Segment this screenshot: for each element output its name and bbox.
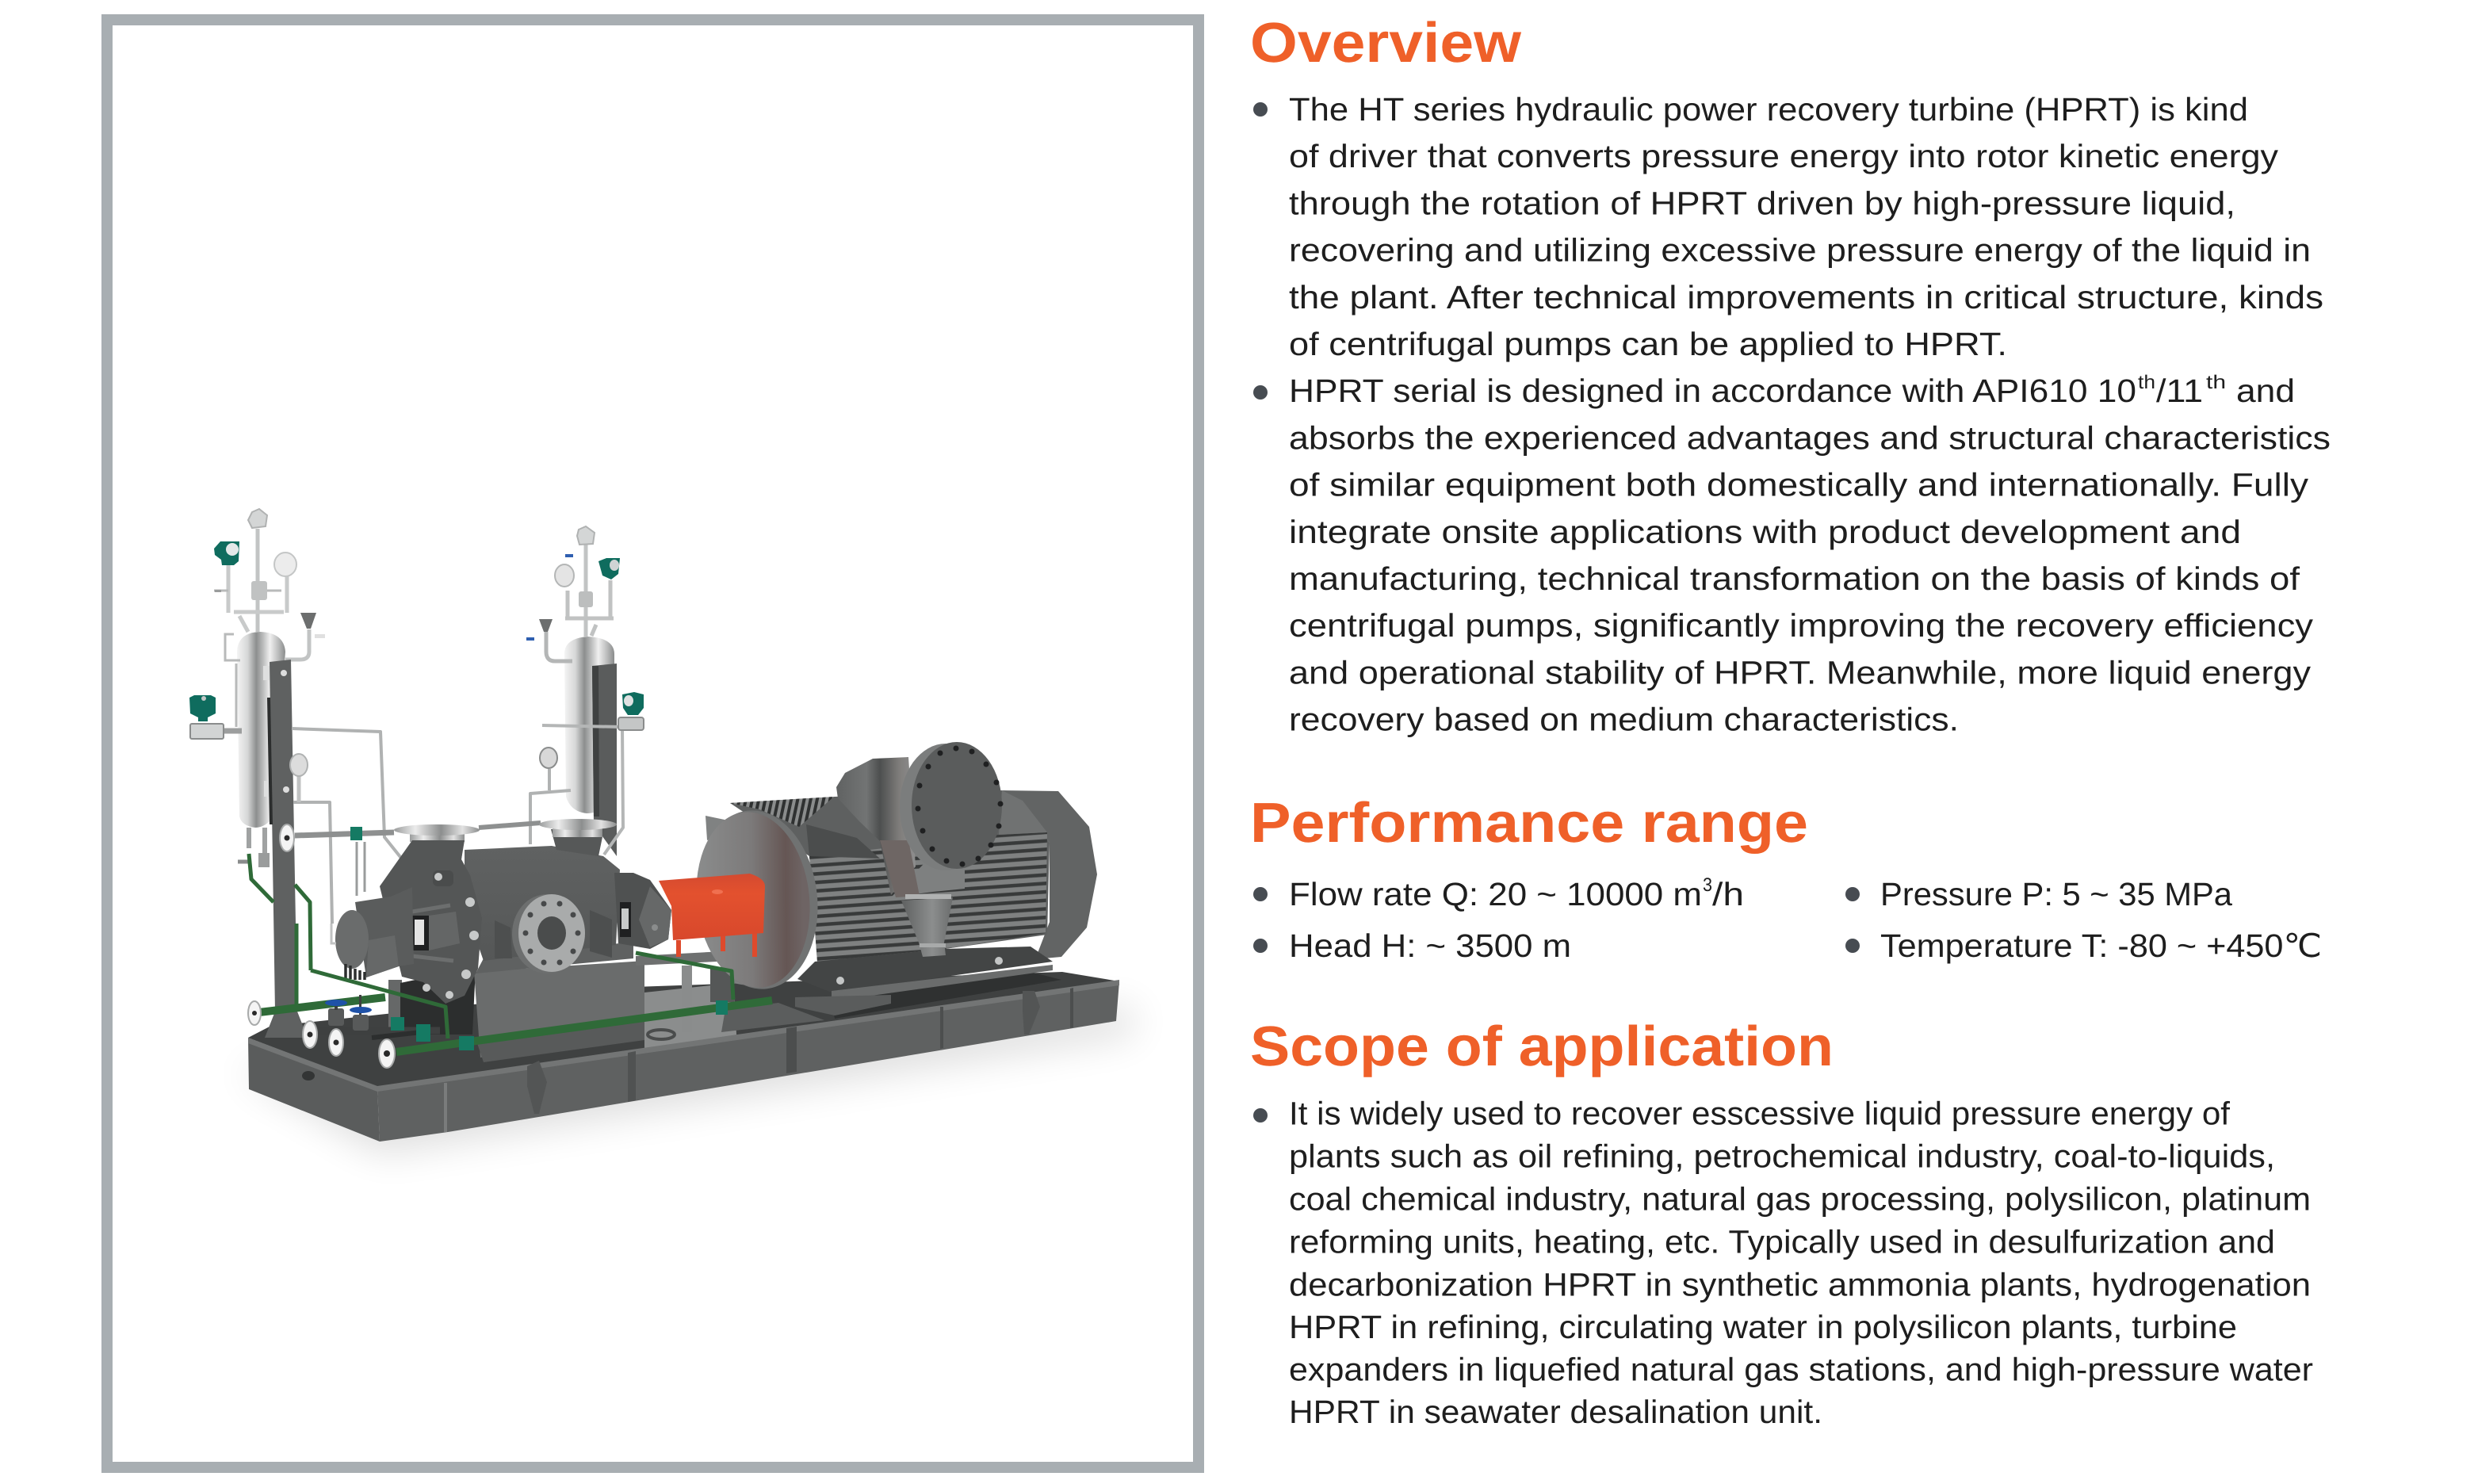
overview paragraph two: th <box>2138 372 2155 393</box>
green process piping: rear <box>249 854 385 1012</box>
list: performance values <box>1253 874 2322 964</box>
vessel: left seal pot <box>224 632 285 867</box>
pump: pedestal <box>474 942 644 1062</box>
overview paragraph two: and operational stability of HPRT. Meanwhile, more liquid energy <box>1289 654 2312 690</box>
overview paragraph two: absorbs the experienced advantages and structural characteristics <box>1289 419 2331 456</box>
pump: volute with bolts <box>380 840 482 1004</box>
valves and drain piping <box>319 995 440 1038</box>
bullet marker <box>1253 102 1268 117</box>
overview paragraph two: centrifugal pumps, significantly improving the recovery efficiency <box>1289 607 2314 644</box>
pressure gauges on piping <box>290 748 557 776</box>
vessel: right seal pot <box>564 637 614 813</box>
scope paragraph: coal chemical industry, natural gas processing, polysilicon, platinum <box>1289 1181 2311 1218</box>
overview paragraph one: recovering and utilizing excessive pressure energy of the liquid in <box>1289 232 2311 269</box>
baseplate top surface <box>248 972 1119 1088</box>
overview paragraph two: th <box>2206 372 2226 393</box>
transmitter: left side <box>189 695 224 739</box>
scope paragraph: HPRT in seawater desalination unit. <box>1289 1394 1822 1430</box>
item: pressure: Pressure P: 5 ~ 35 MPa <box>1880 876 2232 912</box>
motor: terminal reducer cone <box>901 894 953 957</box>
motor: front end shield <box>688 805 826 995</box>
teal pipe clamps <box>350 827 728 1050</box>
instrument tree: left <box>214 509 325 660</box>
motor: terminal box bracket <box>880 840 965 897</box>
instrument piping <box>292 725 623 924</box>
pump: coupling-end housing <box>614 873 671 949</box>
item: temperature: Temperature T: -80 ~ +450℃ <box>1880 928 2322 964</box>
item: head: Head H: ~ 3500 m <box>1289 928 1571 964</box>
overview paragraph one: of centrifugal pumps can be applied to HPRT. <box>1289 326 2007 362</box>
column: left support <box>265 660 308 1038</box>
coupling support table <box>636 950 767 1032</box>
item: flow rate: /h <box>1712 876 1744 912</box>
overview paragraph one: The HT series hydraulic power recovery turbine (HPRT) is kind <box>1289 91 2248 128</box>
heading: Performance range: Performance range <box>1250 792 1808 855</box>
ground shadow <box>238 1007 1134 1153</box>
coupling guard: red <box>659 874 765 957</box>
pump: barrel casing <box>465 846 620 961</box>
scope paragraph: decarbonization HPRT in synthetic ammonia plants, hydrogenation <box>1289 1267 2311 1303</box>
motor: rear fan cover <box>1002 790 1097 959</box>
illustration: HPRT turbine unit on baseplate <box>189 509 1134 1153</box>
heading: Overview: Overview <box>1250 12 1522 75</box>
item: flow rate: 3 <box>1703 874 1712 896</box>
motor: finned stator body <box>730 790 1050 962</box>
pump: bearing housing <box>331 887 414 980</box>
instrument tree: right <box>526 526 620 661</box>
pump: suction nozzle and flange <box>394 824 480 888</box>
overview paragraph two: recovery based on medium characteristics. <box>1289 702 1959 738</box>
panel: product image frame <box>107 20 1199 1467</box>
overview paragraph two <box>1289 372 2331 738</box>
pump: under-support <box>388 967 476 1035</box>
overview paragraph one: of driver that converts pressure energy into rotor kinetic energy <box>1289 138 2279 174</box>
overview paragraph two: /11 <box>2156 373 2203 409</box>
pump: discharge nozzle and flange <box>539 819 617 856</box>
scope paragraph <box>1289 1096 2313 1430</box>
baseplate front faces <box>248 980 1119 1142</box>
overview paragraph two: manufacturing, technical transformation on the basis of kinds of <box>1289 560 2300 597</box>
column: right support <box>592 664 617 856</box>
white pipe flanges <box>248 824 395 1068</box>
overview paragraph two: integrate onsite applications with product development and <box>1289 514 2241 550</box>
pump: large side flange <box>495 894 612 973</box>
scope paragraph: It is widely used to recover esscessive liquid pressure energy of <box>1289 1096 2231 1132</box>
overview paragraph two: of similar equipment both domestically and internationally. Fully <box>1289 467 2309 503</box>
overview paragraph two: HPRT serial is designed in accordance with API610 10 <box>1289 373 2136 409</box>
motor: terminal box neck <box>836 757 916 895</box>
green process piping: front <box>311 953 772 1052</box>
transmitter: left top <box>214 541 239 565</box>
text block: overview bullets <box>1253 91 2331 738</box>
bullet marker <box>1253 385 1268 400</box>
scope paragraph: expanders in liquefied natural gas stations, and high-pressure water <box>1289 1351 2313 1387</box>
motor: underside and mounting rails <box>795 947 1061 1019</box>
overview paragraph one <box>1289 91 2323 362</box>
overview paragraph two: and <box>2236 373 2295 409</box>
transmitter: right side <box>618 692 644 730</box>
item: flow rate: Flow rate Q: 20 ~ 10000 m <box>1289 876 1702 912</box>
text block: scope of application <box>1253 1096 2313 1430</box>
heading: Scope of application: Scope of application <box>1250 1015 1834 1078</box>
overview paragraph one: the plant. After technical improvements in critical structure, kinds <box>1289 279 2323 316</box>
motor: terminal box cover with bolts <box>900 742 1004 870</box>
overview paragraph one: through the rotation of HPRT driven by high-pressure liquid, <box>1289 185 2235 221</box>
bullet marker <box>1253 1108 1268 1123</box>
scope paragraph: plants such as oil refining, petrochemical industry, coal-to-liquids, <box>1289 1138 2275 1175</box>
scope paragraph: reforming units, heating, etc. Typically used in desulfurization and <box>1289 1224 2275 1260</box>
scope paragraph: HPRT in refining, circulating water in polysilicon plants, turbine <box>1289 1309 2237 1345</box>
